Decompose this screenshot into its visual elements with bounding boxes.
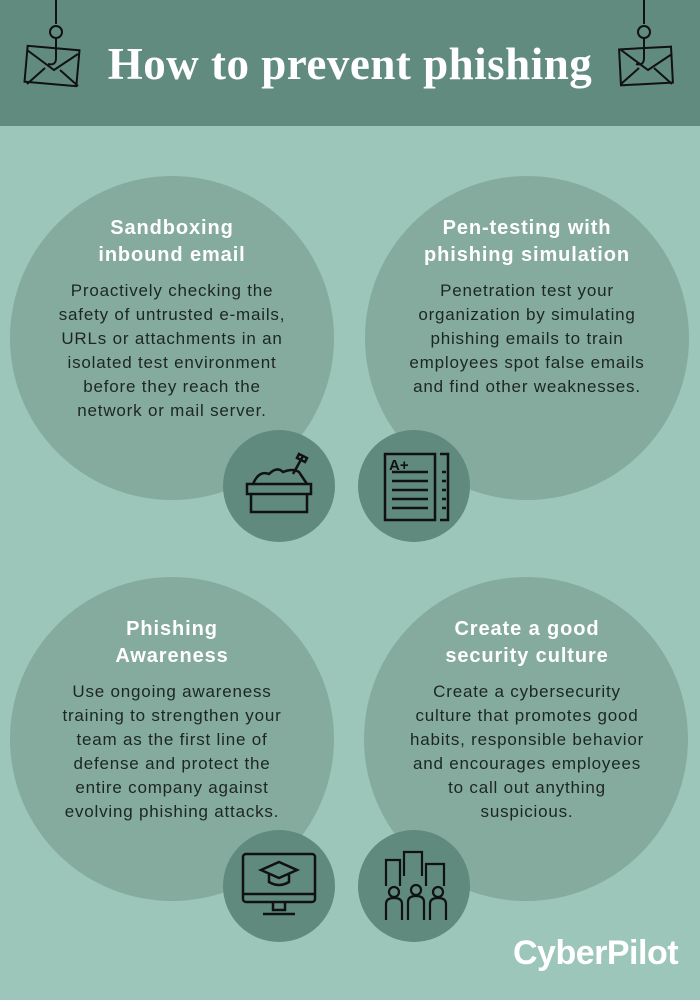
- title: How to prevent phishing: [108, 39, 592, 89]
- text: sandboxing: network or mail server.: [77, 401, 267, 420]
- text: pen-testing: employees spot false emails: [409, 353, 645, 372]
- panel: security culture: [364, 577, 688, 901]
- text: pen-testing: and find other weaknesses.: [413, 377, 641, 396]
- text: sandboxing: Proactively checking the: [71, 281, 273, 300]
- text: pen-testing: phishing simulation: [424, 244, 630, 266]
- icon: hooked envelope left: [24, 0, 80, 88]
- text: awareness: Awareness: [115, 645, 229, 667]
- text: sandboxing: before they reach the: [83, 377, 261, 396]
- text: culture: to call out anything: [448, 778, 606, 797]
- text: sandboxing: [59, 217, 285, 420]
- text: sandboxing: Sandboxing: [110, 217, 234, 239]
- text: awareness: entire company against: [75, 778, 269, 797]
- text: pen-testing: Penetration test your: [440, 281, 614, 300]
- text: awareness: evolving phishing attacks.: [65, 802, 279, 821]
- text: culture: and encourages employees: [413, 754, 641, 773]
- text: culture: security culture: [445, 645, 609, 667]
- text: pen-testing: organization by simulating: [418, 305, 636, 324]
- panel: sandboxing: [10, 176, 334, 500]
- text: culture: suspicious.: [481, 802, 573, 821]
- text: sandboxing: URLs or attachments in an: [61, 329, 283, 348]
- panel: pen-testing: [365, 176, 689, 500]
- text: pen-testing: Pen-testing with: [443, 217, 611, 239]
- icon: monitor graduation cap: [223, 830, 335, 942]
- panel: awareness: [10, 577, 334, 901]
- text: awareness: Phishing: [126, 618, 218, 640]
- text: culture: [410, 618, 644, 821]
- icon: hooked envelope right: [618, 0, 674, 86]
- logo: CyberPilot: [513, 934, 678, 972]
- icon: team city: [358, 830, 470, 942]
- text: culture: Create a cybersecurity: [433, 682, 621, 701]
- text: culture: culture that promotes good: [415, 706, 639, 725]
- header: [0, 0, 700, 126]
- icon: sandbox: [223, 430, 335, 542]
- text: awareness: [62, 618, 282, 821]
- icon: graded document: [358, 430, 470, 542]
- text: pen-testing: [409, 217, 645, 396]
- text: culture: habits, responsible behavior: [410, 730, 644, 749]
- text: culture: Create a good: [454, 618, 600, 640]
- text: sandboxing: inbound email: [98, 244, 246, 266]
- text: pen-testing: phishing emails to train: [430, 329, 624, 348]
- text: awareness: training to strengthen your: [62, 706, 282, 725]
- text: sandboxing: isolated test environment: [68, 353, 276, 372]
- text: awareness: Use ongoing awareness: [72, 682, 272, 701]
- text: awareness: defense and protect the: [73, 754, 271, 773]
- icon: graded document: A+: [389, 457, 409, 474]
- text: awareness: team as the first line of: [76, 730, 268, 749]
- text: sandboxing: safety of untrusted e-mails,: [59, 305, 285, 324]
